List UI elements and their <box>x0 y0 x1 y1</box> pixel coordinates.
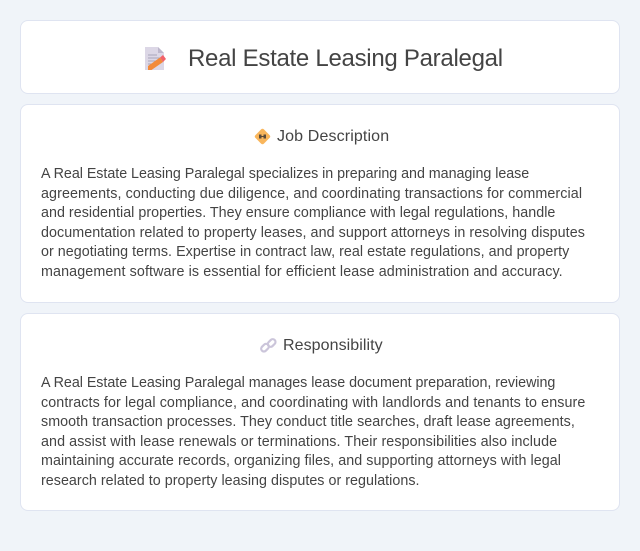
panel: title <box>20 20 620 94</box>
text: job description body: agreements, conducting due diligence, and coordinating transactions for commercial <box>41 186 582 202</box>
icon: chain link <box>260 338 276 353</box>
text: responsibility body: maintaining accurate records, organizing files, and supporting attorneys with legal <box>41 453 561 469</box>
heading: job description: Job Description <box>277 128 389 145</box>
text: responsibility body: and assist with lease renewals or terminations. Their responsibilities also include <box>41 434 557 450</box>
icon: document with pencil <box>145 47 166 70</box>
text: responsibility body: contracts for legal compliance, and coordinating with landlords and tenants to ensure <box>41 394 585 410</box>
panel: job description <box>20 104 620 303</box>
heading: title: Real Estate Leasing Paralegal <box>188 45 503 72</box>
text: job description body <box>41 166 585 280</box>
text: job description body: management software is essential for efficient lease administration and accuracy. <box>41 264 563 280</box>
heading: responsibility: Responsibility <box>283 337 383 354</box>
text: job description body: or negotiating terms. Expertise in contract law, real estate regulations, and property <box>41 244 569 260</box>
text: responsibility body: research related to property leasing disputes or regulations. <box>41 472 420 488</box>
text: job description body: A Real Estate Leasing Paralegal specializes in preparing and managing lease <box>41 166 529 182</box>
text: responsibility body: smooth transaction processes. They conduct title searches, draft lease agreements, <box>41 414 575 430</box>
icon: diamond sign <box>254 128 270 144</box>
panel: responsibility <box>20 313 620 511</box>
text: responsibility body: A Real Estate Leasing Paralegal manages lease document preparation, reviewing <box>41 375 555 391</box>
text: responsibility body <box>41 375 585 488</box>
text: job description body: documentation related to property leases, and support attorneys in resolving disputes <box>41 224 585 240</box>
text: job description body: and residential properties. They ensure compliance with legal regulations, handle <box>41 205 555 221</box>
